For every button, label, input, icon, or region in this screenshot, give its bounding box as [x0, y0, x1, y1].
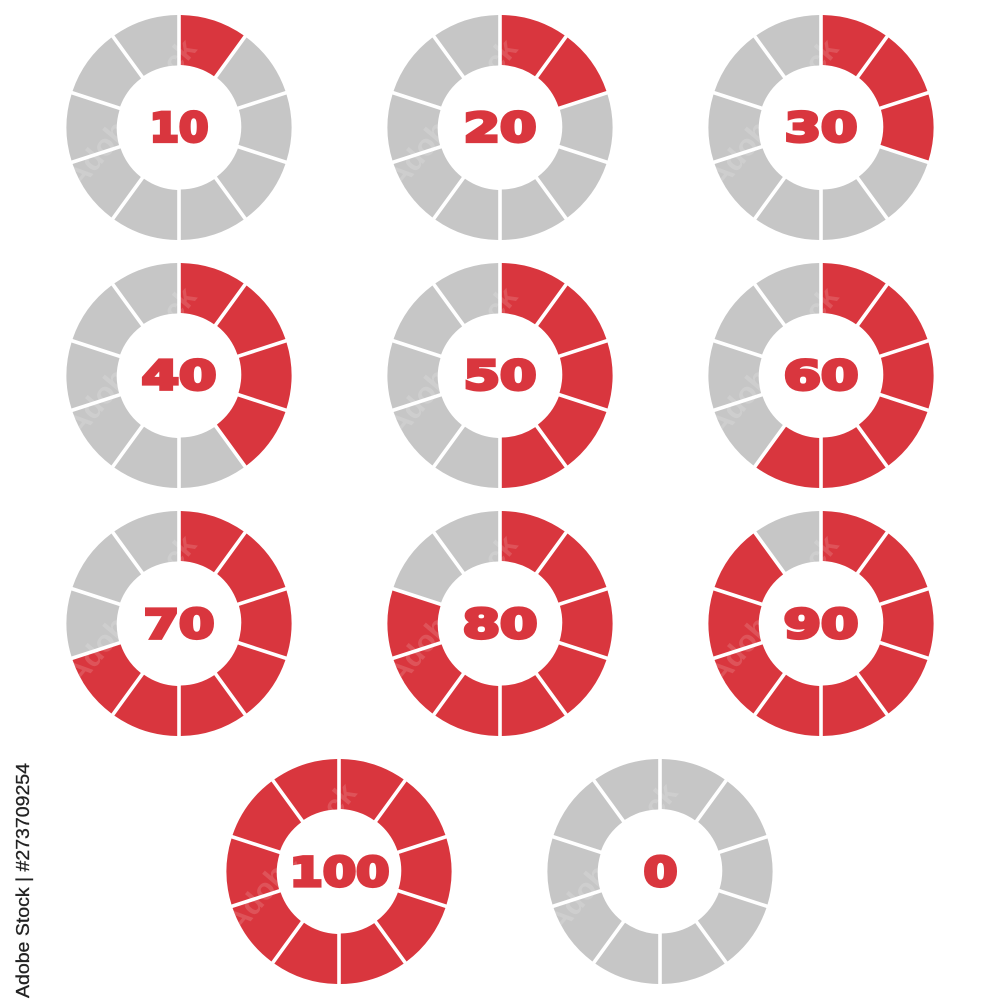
gauge: 50 percent	[373, 246, 627, 505]
value: 70: 70	[144, 602, 214, 648]
value: 90: 90	[784, 602, 858, 648]
value: 100: 100	[290, 850, 389, 896]
value: 30: 30	[785, 105, 857, 151]
gauge: 90 percent	[694, 494, 948, 753]
gauge: 0 percent	[533, 742, 787, 1000]
value: 10: 10	[150, 105, 208, 151]
gauge: 10 percent	[52, 0, 306, 257]
value: 80: 80	[463, 602, 537, 648]
faint watermark over the gauges: Adobe Stock	[381, 281, 524, 442]
gauge: 20 percent	[373, 0, 627, 257]
gauge: 80 percent	[373, 494, 627, 753]
stock image identifier, vertical: Adobe Stock | #273709254	[13, 763, 33, 998]
faint watermark over the gauges: Adobe Stock	[60, 33, 203, 194]
gauge: 40 percent	[52, 246, 306, 505]
faint watermark over the gauges: Adobe Stock	[541, 777, 684, 938]
faint watermark over the gauges: Adobe Stock	[60, 281, 203, 442]
faint watermark over the gauges: Adobe Stock	[381, 529, 524, 690]
faint watermark over the gauges: Adobe Stock	[60, 529, 203, 690]
value: 0: 0	[644, 850, 677, 896]
value: 40: 40	[142, 353, 216, 399]
gauge: 100 percent	[212, 742, 466, 1000]
value: 60: 60	[784, 353, 858, 399]
gauge: 60 percent	[694, 246, 948, 505]
gauge: 30 percent	[694, 0, 948, 257]
faint watermark over the gauges: Adobe Stock	[220, 777, 363, 938]
faint watermark over the gauges: Adobe Stock	[702, 529, 845, 690]
faint watermark over the gauges: Adobe Stock	[702, 281, 845, 442]
faint watermark over the gauges: Adobe Stock	[381, 33, 524, 194]
faint watermark over the gauges: Adobe Stock	[702, 33, 845, 194]
value: 50: 50	[464, 353, 536, 399]
faint watermark over the gauges	[60, 33, 845, 938]
value: 20: 20	[464, 105, 536, 151]
gauge: 70 percent	[52, 494, 306, 753]
